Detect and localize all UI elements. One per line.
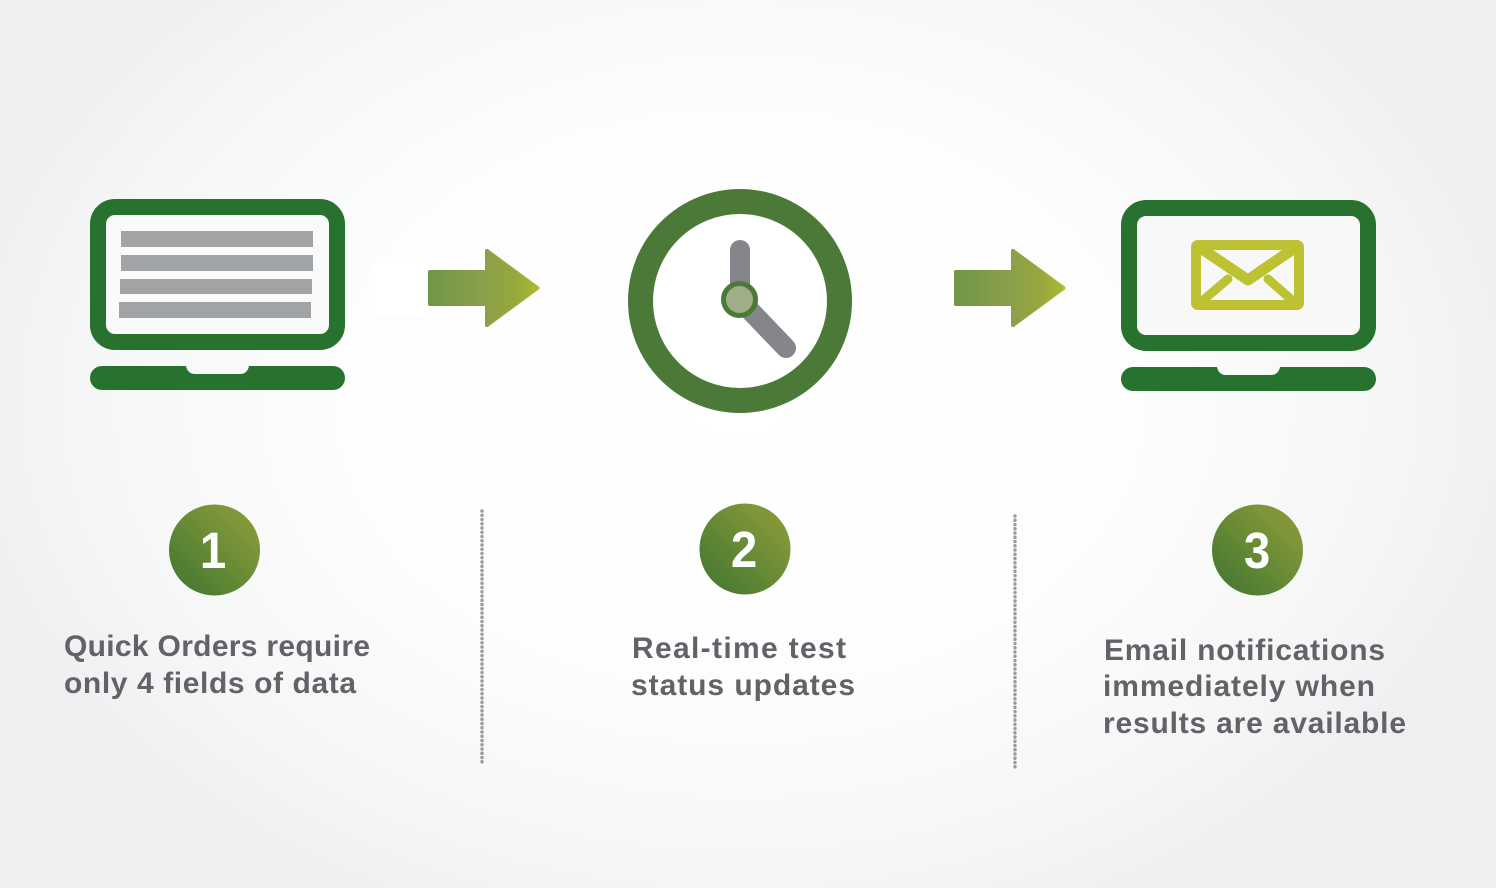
text: step 1: only 4 fields of data [64, 667, 356, 700]
text: step 3: Email notifications [1104, 634, 1385, 667]
white smudge left of first arrow [369, 262, 431, 316]
text: step 3: results are available [1103, 707, 1406, 740]
badge: step 3 [1212, 504, 1303, 596]
arrow: step 2 to step 3 [954, 249, 1066, 327]
text: step 2: status updates [631, 669, 855, 702]
form field lines [119, 231, 313, 318]
badge: step 2 [700, 504, 790, 594]
badge: step 1: 1 [200, 522, 226, 579]
badge: step 1 [169, 504, 260, 596]
divider left [480, 511, 484, 766]
envelope [1196, 245, 1299, 305]
badge: step 3: 3 [1244, 522, 1270, 579]
icon: clock [640, 202, 840, 400]
divider right [1013, 516, 1017, 771]
laptop base [90, 366, 345, 390]
text: step 2: Real-time test [632, 632, 846, 665]
badge: step 2: 2 [731, 521, 757, 578]
laptop base [1121, 367, 1376, 391]
text: step 3: immediately when [1103, 670, 1375, 703]
arrow: step 1 to step 2 [428, 249, 540, 327]
clock centre [724, 284, 756, 316]
icon: laptop with envelope [1121, 208, 1376, 391]
text: step 1: Quick Orders require [64, 630, 370, 663]
clock hands [740, 250, 786, 348]
icon: laptop with form [90, 207, 345, 390]
